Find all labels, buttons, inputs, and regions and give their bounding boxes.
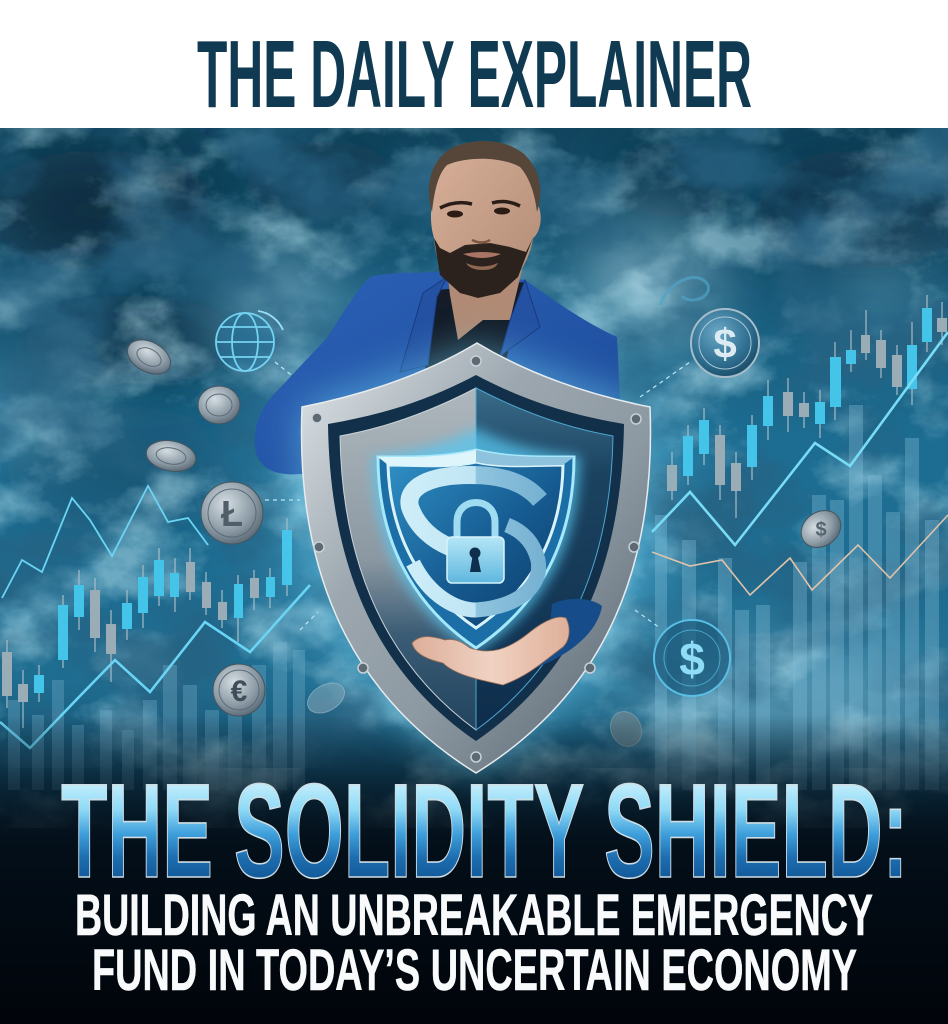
shield glow: [301, 345, 652, 772]
coin: litecoin: [201, 482, 263, 544]
shirt: [425, 282, 525, 368]
coin: euro: [213, 664, 265, 716]
letter S upper stroke: [409, 475, 540, 547]
coin: euro: €: [231, 675, 248, 708]
right trend line rising: [652, 332, 948, 545]
right candlesticks: [667, 295, 947, 518]
left candlesticks: [2, 518, 292, 728]
jacket and arm: [255, 270, 620, 474]
jacket sleeve at hand: [535, 599, 602, 668]
bottom fade: [0, 715, 948, 1024]
right tan line: [652, 515, 948, 595]
coin: litecoin: Ł: [221, 493, 243, 534]
emblem inner shield: [388, 462, 563, 628]
letter S lower stroke: [413, 525, 539, 610]
coin: silver middle: [198, 386, 240, 424]
icon: faint swirl: [660, 277, 708, 305]
chin skin patches: [466, 263, 498, 270]
shield right face: [476, 388, 613, 730]
shield: [301, 343, 652, 773]
header band: [0, 0, 948, 128]
coin: silver top left: [122, 333, 176, 381]
open hand: [412, 617, 569, 685]
shield steel rim: [301, 343, 651, 773]
padlock: [447, 502, 504, 583]
dashed connectors: [265, 362, 690, 630]
beard: [434, 238, 533, 298]
stormy sky background: [0, 128, 948, 878]
left volume bars: [8, 642, 305, 790]
coin: glowing dollar lower right: $: [679, 633, 705, 685]
left upper line: [2, 486, 208, 598]
coin: dim small left: [302, 677, 350, 719]
neck: [447, 270, 522, 340]
left market chart: [0, 486, 310, 790]
eyes and brows: [440, 202, 520, 242]
coin: dim small bottom: [605, 706, 647, 752]
emblem halo: [372, 428, 580, 652]
shield left face: [340, 388, 476, 730]
coin: glowing dollar lower right: [654, 620, 730, 696]
main title: [61, 757, 908, 1003]
hair: [429, 141, 540, 212]
emblem top highlight: [378, 450, 476, 466]
right market chart: [652, 295, 948, 790]
coin: silver right: [794, 503, 848, 555]
head: [431, 150, 541, 297]
coin: silver right: $: [815, 519, 827, 541]
coin: silver tilted: [144, 437, 198, 475]
lip area: [463, 252, 501, 258]
right volume bars: [655, 405, 939, 790]
emblem top highlight right: [476, 450, 574, 466]
lapels: [400, 277, 540, 372]
shield rivets: [312, 356, 641, 762]
left trend line: [0, 585, 310, 748]
shield dark frame: [328, 375, 624, 741]
man in blue jacket: [255, 141, 620, 474]
emblem outer band: [378, 450, 574, 648]
coin: dollar upper right: [691, 309, 759, 377]
icon: globe: [216, 311, 283, 371]
coin: dollar upper right: $: [713, 320, 737, 367]
floating coins and icons: [122, 277, 848, 752]
